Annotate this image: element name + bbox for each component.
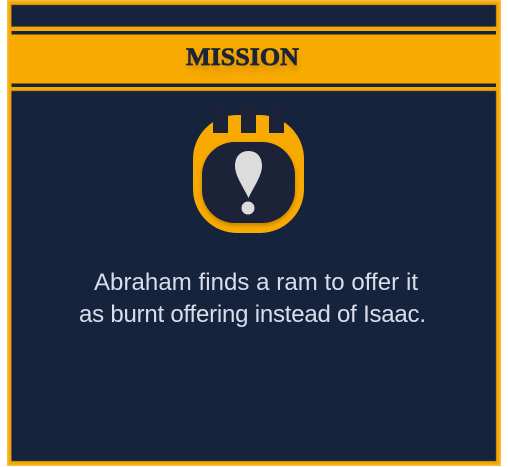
text block: as burnt offering instead of Isaac. bbox=[79, 301, 426, 328]
icon: exclamation mark bbox=[235, 151, 262, 214]
main panel bbox=[12, 91, 496, 461]
text block bbox=[79, 269, 426, 328]
heading banner bbox=[8, 31, 500, 87]
text block: Abraham finds a ram to offer it bbox=[94, 269, 418, 296]
icon: calendar alert bbox=[193, 106, 304, 233]
heading banner: MISSION bbox=[186, 50, 299, 77]
heading: MISSION bbox=[186, 44, 299, 71]
top dark band bbox=[12, 5, 496, 26]
